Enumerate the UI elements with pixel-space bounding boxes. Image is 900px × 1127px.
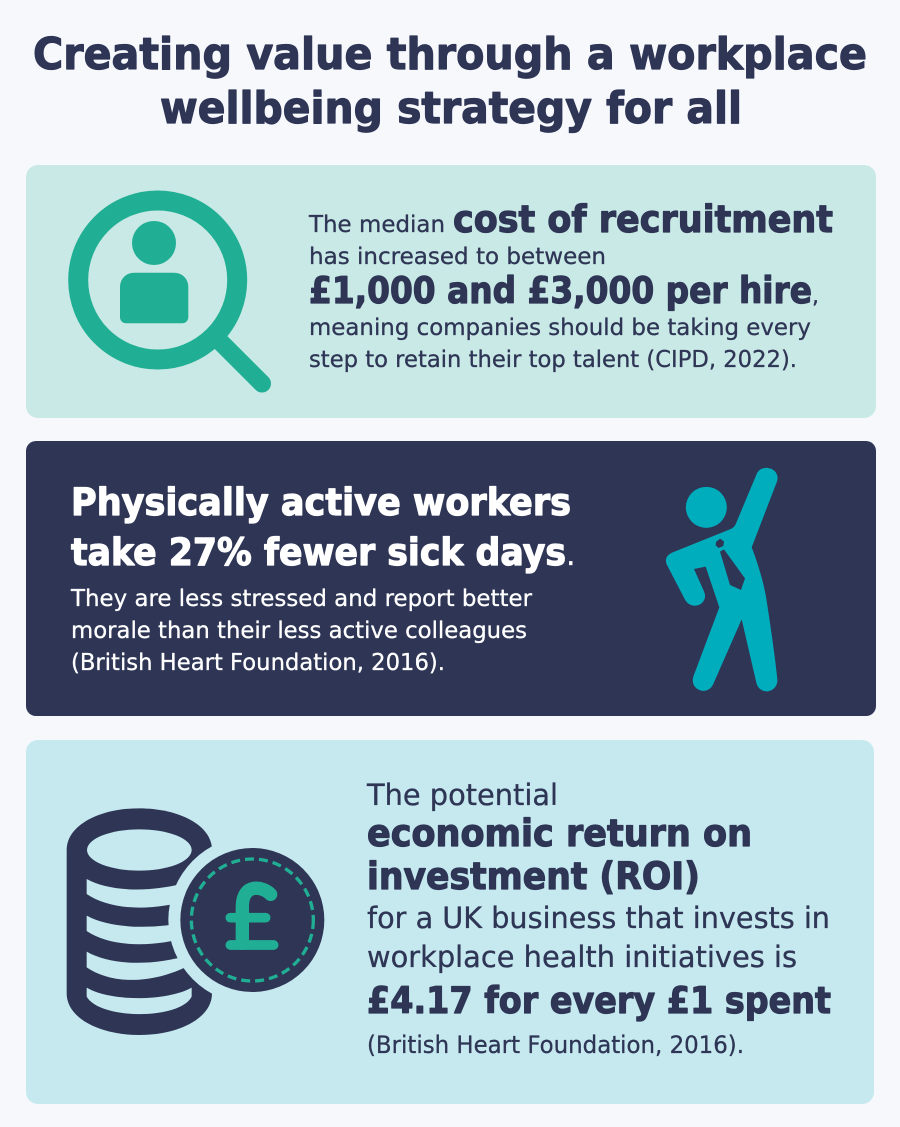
text: ROI statistic: £4.17 for every £1 spent [367, 979, 831, 1022]
text: physical activity statistic: take 27% fewer sick days [71, 531, 566, 574]
text: recruitment statistic: , [812, 284, 819, 309]
text: physical activity statistic: They are less stressed and report better [70, 584, 532, 612]
text: ROI statistic: for a UK business that invests in [367, 901, 830, 935]
text: recruitment statistic: cost of recruitment [453, 198, 833, 241]
icon: magnifying glass with person [78, 200, 262, 384]
panel: cost of recruitment [26, 165, 876, 418]
text: recruitment statistic [308, 198, 833, 373]
text: ROI statistic: economic return on [367, 812, 752, 855]
icon: coin stack with pound coin [67, 808, 336, 1035]
title: wellbeing strategy for all [160, 83, 742, 134]
title: Creating value through a workplace [33, 29, 867, 80]
text: physical activity statistic: Physically active workers [71, 481, 571, 524]
title [33, 29, 867, 134]
text: recruitment statistic: £1,000 and £3,000 per hire [309, 269, 812, 312]
panel: economic return on investment [26, 740, 874, 1104]
text: recruitment statistic: step to retain their top talent (CIPD, 2022). [309, 347, 797, 373]
text: physical activity statistic: . [566, 538, 576, 573]
text: recruitment statistic: meaning companies should be taking every [309, 315, 811, 341]
text: physical activity statistic: (British Heart Foundation, 2016). [71, 648, 445, 676]
text: ROI statistic: workplace health initiatives is [367, 940, 797, 974]
text: ROI statistic: The potential [366, 778, 558, 812]
text: physical activity statistic [70, 481, 576, 676]
text: physical activity statistic: morale than their less active colleagues [71, 616, 527, 644]
text: ROI statistic: investment (ROI) [367, 855, 700, 898]
text: ROI statistic: (British Heart Foundation, 2016). [367, 1031, 744, 1059]
text: ROI statistic [366, 778, 831, 1059]
panel: physically active workers [26, 441, 876, 716]
icon: active worker figure [666, 468, 778, 691]
text: recruitment statistic: The median [308, 212, 445, 238]
text: recruitment statistic: has increased to between [309, 244, 606, 270]
